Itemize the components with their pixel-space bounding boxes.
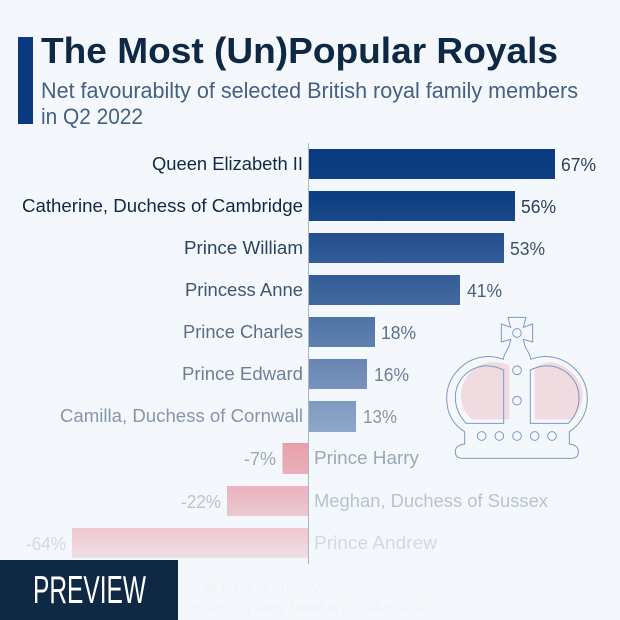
- row: Princess Anne: Princess Anne: [185, 279, 303, 300]
- row: Meghan: Meghan, Duchess of Sussex: [314, 490, 549, 511]
- row: Prince William: Prince William: [184, 237, 303, 258]
- row: Prince Andrew: -64%: [26, 533, 66, 554]
- row: Queen Elizabeth II: 67%: [561, 154, 596, 175]
- bar chart: [22, 149, 596, 558]
- row: Camilla: [60, 401, 397, 432]
- row: Prince Edward: 16%: [374, 364, 409, 385]
- footnote: are saying they have a positive opinion: [178, 597, 451, 616]
- row: Prince Andrew: Prince Andrew: [314, 532, 438, 553]
- icon: crown: [447, 317, 587, 458]
- axis line: [308, 143, 310, 564]
- row: Prince Harry: Prince Harry: [314, 447, 420, 468]
- subtitle: Net favourabilty of selected British royal family members: [41, 78, 578, 103]
- row: Queen Elizabeth II: [152, 149, 596, 179]
- subtitle: [41, 78, 578, 129]
- subtitle: in Q2 2022: [41, 104, 143, 129]
- row: Camilla: 13%: [363, 406, 397, 427]
- row: Prince Harry: -7%: [244, 448, 276, 469]
- footnote: [178, 578, 451, 616]
- row: Prince William: [184, 233, 545, 263]
- row: Catherine: [22, 191, 556, 221]
- row: Prince Charles: 18%: [381, 322, 416, 343]
- row: Queen Elizabeth II: Queen Elizabeth II: [152, 153, 303, 174]
- preview banner: PREVIEW: [33, 569, 146, 612]
- row: Prince Charles: Prince Charles: [183, 321, 303, 342]
- row: Princess Anne: [185, 275, 502, 305]
- row: Princess Anne: 41%: [467, 280, 502, 301]
- row: Meghan: -22%: [181, 491, 221, 512]
- row: Prince Andrew: [26, 528, 438, 558]
- preview banner: [0, 560, 178, 620]
- row: Prince Edward: [182, 359, 409, 389]
- row: Meghan: [181, 486, 549, 516]
- title accent bar: [18, 37, 33, 124]
- row: Catherine: 56%: [521, 196, 556, 217]
- row: Camilla: Camilla, Duchess of Cornwall: [60, 405, 303, 426]
- row: Prince Charles: [183, 317, 416, 347]
- row: Prince Harry: [244, 443, 420, 474]
- row: Prince William: 53%: [510, 238, 545, 259]
- row: Prince Edward: Prince Edward: [182, 363, 303, 384]
- footnote: ect at time of survey.: [178, 578, 323, 597]
- title: The Most (Un)Popular Royals: [41, 30, 558, 71]
- row: Catherine: Catherine, Duchess of Cambridge: [22, 195, 303, 216]
